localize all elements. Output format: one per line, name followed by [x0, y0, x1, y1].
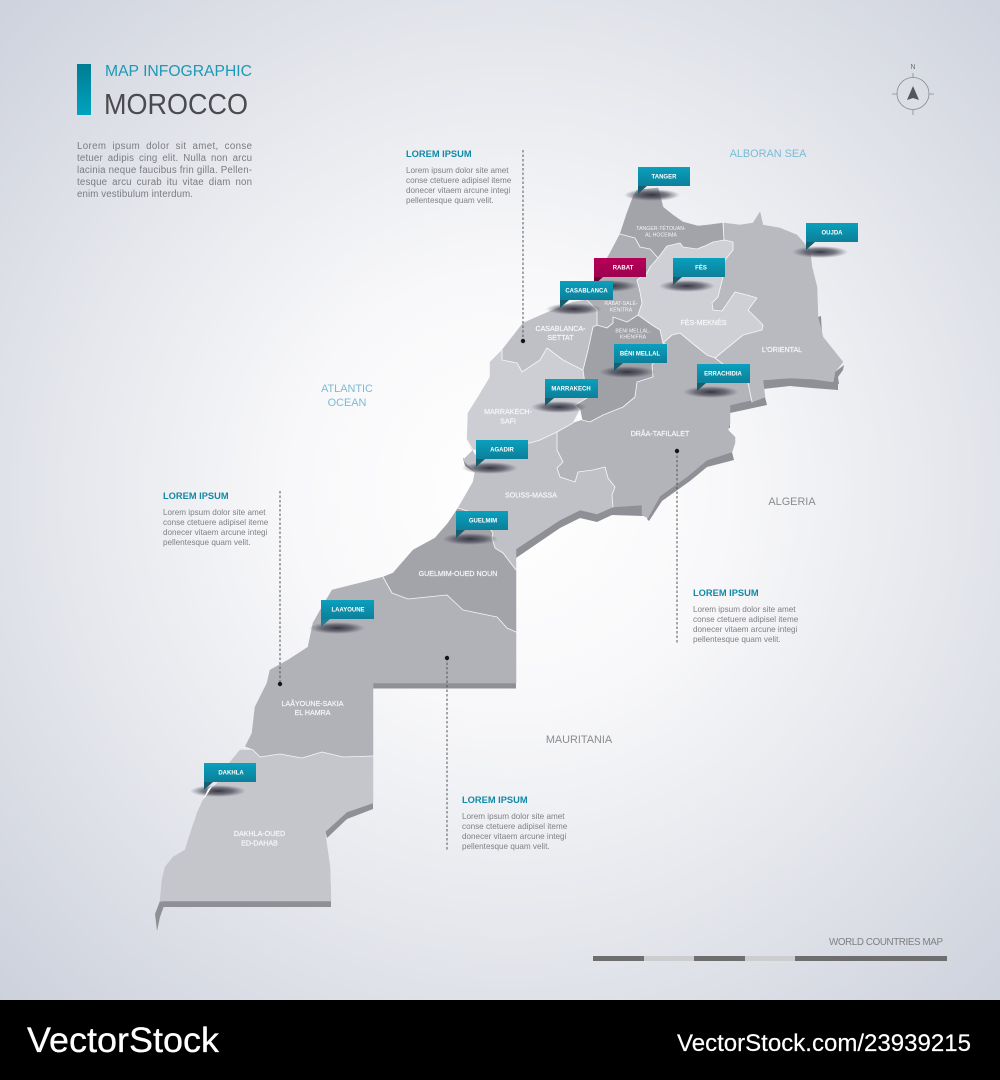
flag: Oujda: OUJDA	[821, 230, 843, 236]
sea and country labels: ALBORAN SEA	[730, 148, 807, 160]
region: L'Oriental	[712, 212, 843, 402]
region labels: ED-DAHAB	[241, 840, 278, 848]
flag: Laayoune: LAAYOUNE	[331, 608, 365, 614]
intro paragraph: lacinia neque faucibus frin gilla. Pellen-	[77, 165, 252, 176]
callout: Laayoune-Sakia El Hamra: LOREM IPSUM	[163, 491, 229, 501]
flag: Rabat: RABAT	[613, 266, 634, 272]
region labels: KÉNITRA	[610, 306, 633, 314]
callout: Southern region: conse ctetuere adipisel iteme	[462, 822, 568, 831]
flag: Tanger: TANGER	[652, 174, 677, 180]
flag: Marrakech: MARRAKECH	[551, 386, 591, 392]
intro paragraph: tetuer adipis cing elit. Nulla non arcu	[77, 153, 252, 164]
icon: compass: N	[910, 64, 916, 71]
flag: Fes	[659, 258, 725, 292]
region: Draa-Tafilalet	[557, 333, 765, 518]
sea and country labels: OCEAN	[328, 397, 366, 409]
callout: Draa-Tafilalet: Lorem ipsum dolor site amet	[693, 605, 796, 614]
flag: Oujda	[792, 223, 858, 258]
callout: Southern region: pellentesque quam velit.	[462, 842, 550, 851]
flag: Casablanca	[546, 281, 613, 315]
region labels: GUELMIM-OUED NOUN	[419, 570, 497, 578]
title accent bar	[77, 64, 91, 115]
flag: Laayoune	[309, 600, 374, 634]
callout: Casablanca-Settat: donecer vitaem arcune integi	[406, 186, 511, 195]
region: Tanger-Tetouan-Al Hoceima	[620, 188, 724, 258]
footer band: VectorStock.com/23939215	[677, 1030, 971, 1057]
region labels: FÈS-MEKNÈS	[680, 318, 727, 327]
callout: Laayoune-Sakia El Hamra: pellentesque quam velit.	[163, 538, 251, 547]
region labels: RABAT-SALÉ-	[604, 300, 638, 307]
icon: compass	[892, 64, 934, 115]
flag: Dakhla	[190, 763, 256, 800]
region: Marrakech-Safi	[467, 348, 587, 450]
callout: Southern region	[445, 656, 568, 851]
flag: Agadir	[462, 440, 528, 474]
footer band: VectorStock	[27, 1021, 220, 1060]
region labels: BÉNI MELLAL-	[615, 328, 651, 334]
callout: Draa-Tafilalet: pellentesque quam velit.	[693, 635, 781, 644]
region labels: MARRAKECH-	[484, 408, 532, 416]
region labels: DAKHLA-OUED	[234, 830, 285, 838]
region labels: L'ORIENTAL	[762, 346, 802, 354]
sea and country labels: ATLANTIC	[321, 383, 373, 395]
callout: Casablanca-Settat	[406, 149, 525, 343]
callout: Casablanca-Settat: conse ctetuere adipisel iteme	[406, 176, 512, 185]
region: Fes-Meknes	[637, 240, 763, 358]
sea and country labels: MAURITANIA	[546, 734, 613, 746]
flag: Errachidia	[683, 364, 750, 398]
callout: Southern region: LOREM IPSUM	[462, 795, 528, 805]
flag: Guelmim: GUELMIM	[469, 518, 497, 524]
region labels: TANGER-TÉTOUAN-	[636, 225, 686, 232]
region: Rabat-Sale-Kenitra	[587, 234, 658, 328]
region labels: DRÂA-TAFILALET	[631, 429, 690, 438]
callout: Laayoune-Sakia El Hamra: Lorem ipsum dolor site amet	[163, 508, 266, 517]
flag: Beni Mellal: BÉNI MELLAL	[620, 350, 660, 358]
callout: Draa-Tafilalet: donecer vitaem arcune integi	[693, 625, 798, 634]
flag: Marrakech	[531, 379, 598, 413]
scale bar	[593, 937, 947, 961]
callout: Laayoune-Sakia El Hamra: donecer vitaem arcune integi	[163, 528, 268, 537]
callout: Draa-Tafilalet: LOREM IPSUM	[693, 588, 759, 598]
callout: Casablanca-Settat: pellentesque quam velit.	[406, 196, 494, 205]
region: Guelmim-Oued Noun	[383, 508, 516, 632]
intro paragraph: tesque arcu curab itu vitae diam non	[77, 177, 252, 188]
region labels: CASABLANCA-	[535, 325, 586, 333]
map of Morocco	[155, 188, 844, 931]
flag: Rabat	[582, 258, 646, 292]
region labels: SOUSS-MASSA	[505, 492, 557, 500]
callout: Laayoune-Sakia El Hamra	[163, 491, 282, 686]
flag: Casablanca: CASABLANCA	[565, 288, 608, 294]
footer band	[0, 1000, 1000, 1080]
flag: Agadir: AGADIR	[490, 448, 514, 454]
flag: Guelmim	[442, 511, 508, 545]
flag: Fes: FÈS	[695, 264, 707, 272]
region: Beni Mellal-Khenifra	[575, 315, 667, 422]
title block	[77, 63, 252, 121]
title: MOROCCO	[104, 89, 248, 121]
intro paragraph	[77, 141, 252, 200]
intro paragraph: Lorem ipsum dolor sit amet, conse	[77, 141, 252, 152]
callout: Draa-Tafilalet: conse ctetuere adipisel iteme	[693, 615, 799, 624]
callout: Southern region: Lorem ipsum dolor site amet	[462, 812, 565, 821]
region labels: LAÂYOUNE-SAKIA	[282, 699, 344, 708]
region: Dakhla-Oued Ed-Dahab	[160, 750, 373, 901]
sea and country labels	[321, 148, 816, 746]
callout: Southern region: donecer vitaem arcune integi	[462, 832, 567, 841]
intro paragraph: enim vestibulum interdum.	[77, 189, 193, 200]
region labels: EL HAMRA	[294, 709, 331, 717]
flag: Dakhla: DAKHLA	[218, 770, 244, 776]
flag: Errachidia: ERRACHIDIA	[704, 372, 742, 378]
callout: Casablanca-Settat: Lorem ipsum dolor site amet	[406, 166, 509, 175]
region: Laayoune-Sakia El Hamra	[245, 577, 516, 758]
scale bar: WORLD COUNTRIES MAP	[829, 937, 943, 948]
extrusion shadows	[155, 316, 844, 931]
flag: Tanger	[624, 167, 690, 201]
callout: Draa-Tafilalet	[675, 449, 799, 644]
subtitle: MAP INFOGRAPHIC	[105, 63, 252, 80]
region: Casablanca-Settat	[502, 300, 597, 372]
region labels: KHÉNIFRA	[620, 334, 647, 340]
region labels: AL HOCEIMA	[645, 232, 677, 238]
region: Souss-Massa	[458, 432, 615, 570]
callout: Casablanca-Settat: LOREM IPSUM	[406, 149, 472, 159]
region labels: SETTAT	[547, 334, 574, 342]
internal region borders	[245, 223, 763, 758]
region labels: SAFI	[500, 418, 516, 426]
flag: Beni Mellal	[599, 344, 667, 378]
region labels	[234, 225, 802, 848]
callout: Laayoune-Sakia El Hamra: conse ctetuere adipisel iteme	[163, 518, 269, 527]
sea and country labels: ALGERIA	[768, 496, 816, 508]
